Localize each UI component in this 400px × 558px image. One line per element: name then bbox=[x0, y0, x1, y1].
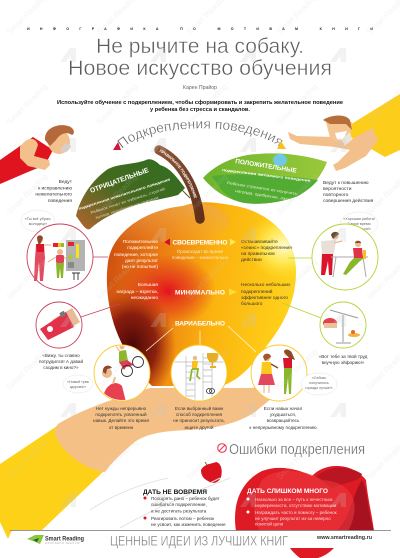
apple text: right column: Несколько небольших bbox=[241, 282, 291, 288]
text: Smart Reading bbox=[95, 172, 139, 216]
panel text: неуверенности, отсутствию мотивации bbox=[255, 503, 337, 508]
text: Smart Reading bbox=[95, 347, 139, 391]
kicker line: ИНФОГРАФИКА ПО МОТИВАМ КНИГИ bbox=[27, 27, 373, 31]
speech bubble: well done bbox=[21, 210, 55, 232]
figure: woman top left bbox=[0, 125, 74, 184]
url: www.smartreading.ru bbox=[316, 535, 372, 541]
text: Smart Reading bbox=[5, 172, 49, 216]
figure: man top right bbox=[288, 94, 400, 171]
speech bubble: good job bbox=[340, 212, 378, 236]
circle: violin lesson bbox=[251, 345, 307, 401]
description bbox=[90, 187, 165, 220]
description bbox=[227, 180, 299, 202]
speech bubble: new trick: «Новый трюк bbox=[67, 380, 89, 384]
panel text: не усвоит, как изменить поведение bbox=[151, 522, 226, 527]
apple text: left column: (но не попытки!) bbox=[122, 264, 158, 270]
author: Карен Прайор bbox=[183, 84, 217, 91]
text: negative effect: поведения bbox=[48, 199, 72, 204]
apple text: left column: поведение, которое bbox=[114, 253, 158, 258]
text: negative effect: к исправлению bbox=[38, 186, 72, 192]
heading: ОТРИЦАТЕЛЬНЫЕ bbox=[89, 167, 150, 195]
caption: ladder: ищите другой bbox=[185, 424, 214, 430]
arm with sleeve bottom left bbox=[0, 385, 285, 539]
circle: bicycle bbox=[94, 344, 150, 402]
caption: scales: внучную эйфорию!» bbox=[322, 359, 365, 365]
title: Новое искусство обучения bbox=[68, 56, 332, 80]
apple text: left column: дает результат bbox=[125, 259, 159, 264]
right leaf: positive bbox=[203, 153, 327, 204]
panel text bbox=[151, 496, 226, 527]
panel text: не улучшит результат из-за неверно bbox=[255, 516, 331, 521]
text: negative effect bbox=[35, 179, 73, 204]
text: Smart Reading bbox=[275, 172, 319, 216]
apple text: left column: подкрепляйте bbox=[127, 244, 158, 251]
apple text: right column: на правильном bbox=[241, 252, 275, 257]
apple heading: timely bbox=[172, 240, 229, 260]
text: Smart Reading bbox=[5, 347, 49, 391]
panel text: Насколько за все – путь к нечестным bbox=[255, 497, 332, 502]
apple text: right column: «сеанс» подкрепления bbox=[241, 246, 292, 251]
caption: cinema: «Вижу, ты славно bbox=[42, 353, 80, 358]
text: Smart Reading bbox=[275, 347, 319, 391]
apple text: left column bbox=[114, 239, 159, 301]
apple text: right column: Останавливайте bbox=[241, 238, 278, 245]
caption: ladder bbox=[173, 405, 225, 430]
heading: reinforcement errors: Ошибки подкрепления bbox=[229, 442, 365, 458]
text: negative effect: нежелательного bbox=[35, 192, 72, 198]
speech bubble: good job: «Хорошая работа! bbox=[343, 217, 375, 221]
speech bubble: new trick: здорово!» bbox=[70, 385, 86, 389]
arrows in apple bbox=[164, 238, 237, 296]
title: Не рычите на собаку. bbox=[96, 34, 304, 58]
table bbox=[331, 257, 368, 277]
caption: scales: «Вот тебе за твой труд bbox=[319, 353, 368, 359]
text: Smart Reading bbox=[5, 437, 49, 481]
red apple remainder bbox=[290, 548, 334, 558]
caption: bicycle: подкреплять усвоенный bbox=[95, 411, 147, 417]
heading: reinforcement of behaviour: Подкрепления поведения bbox=[117, 121, 283, 148]
apple heading: variable: ВАРИАБЕЛЬНО bbox=[175, 320, 225, 328]
text: Smart Reading bbox=[5, 82, 49, 126]
footer: ценные идеи из лучших книг bbox=[45, 542, 80, 544]
speech bubble: good job: прогуляться!» bbox=[347, 227, 371, 231]
apple text: right column: подкреплений bbox=[241, 288, 273, 295]
apple text: left column: Большая bbox=[138, 282, 158, 288]
caption: cinema: потрудился! А давай bbox=[39, 358, 83, 364]
circle: ladder and trophy bbox=[171, 345, 227, 401]
caption: cinema bbox=[39, 353, 83, 370]
sticker chart bbox=[53, 243, 64, 247]
caption: bicycle bbox=[93, 406, 149, 430]
panel: too late bbox=[143, 489, 226, 527]
speech bubble: better now: «Сейчас bbox=[312, 376, 326, 380]
text: Smart Reading bbox=[185, 172, 229, 216]
caption: violin: Если навык начал bbox=[264, 406, 303, 411]
text: Smart Reading bbox=[275, 82, 319, 126]
caption: violin: к непрерывному подкреплению bbox=[249, 425, 317, 430]
text: Smart Reading bbox=[275, 257, 319, 301]
speech bubble: better now bbox=[301, 373, 337, 395]
description: Ребенок стремится их получить: bbox=[227, 180, 299, 196]
subheading: подкрепления нежелательного поведения bbox=[78, 177, 171, 211]
panel text: а не достигать результата bbox=[151, 508, 207, 514]
speech bubble: well done: молодец!» bbox=[29, 222, 47, 226]
panel text bbox=[255, 497, 337, 526]
apple heading: timely: Происходит во время bbox=[177, 249, 224, 254]
caption: violin bbox=[249, 406, 317, 430]
logo bbox=[27, 535, 44, 544]
panel heading: ДАТЬ СЛИШКОМ МНОГО bbox=[247, 488, 328, 495]
caption: ladder: Если выбранный вами bbox=[175, 405, 224, 411]
speech bubble: good job: Самое время bbox=[347, 222, 371, 226]
text: positive effect: вероятности bbox=[323, 187, 352, 192]
left leaf: negative bbox=[76, 159, 185, 229]
cabinet bbox=[66, 240, 85, 280]
caption: bicycle: навык. Делайте это время bbox=[93, 417, 149, 423]
footer bbox=[10, 530, 391, 558]
text: negative effect: Ведут bbox=[59, 179, 73, 185]
panel text: Награждать часто и помногу – ребенок bbox=[255, 510, 337, 515]
text: Smart Reading bbox=[95, 437, 139, 481]
water drop bbox=[273, 154, 287, 166]
caption: bicycle: от времени bbox=[109, 425, 134, 430]
circle: scales bbox=[320, 302, 366, 348]
description: выговор, неодобрительное замечание bbox=[95, 196, 159, 220]
brand: Smart Reading bbox=[45, 536, 84, 542]
subheading: подкрепления желаемого поведения bbox=[222, 168, 311, 183]
caption: scales bbox=[319, 353, 368, 365]
marker: yellow triangle bbox=[277, 141, 286, 149]
text: Smart Reading bbox=[185, 82, 229, 126]
text: positive effect: совершения действия bbox=[323, 197, 374, 204]
text: positive effect bbox=[323, 180, 374, 204]
adult bbox=[321, 232, 342, 275]
woman bbox=[34, 235, 51, 281]
caption: cinema: сходим в кино?» bbox=[43, 365, 79, 370]
apple heading: timely: СВОЕВРЕМЕННО bbox=[172, 240, 228, 246]
text: Smart Reading bbox=[5, 257, 49, 301]
stem label: ПРАВИЛЬНОЕ ПОДКРЕПЛЕНИЕ bbox=[160, 149, 197, 198]
subtitle: у ребенка без стресса и скандалов. bbox=[150, 106, 251, 113]
stem and twigs bbox=[154, 145, 206, 224]
apple text: right column: большого bbox=[241, 301, 263, 307]
text: Smart Reading bbox=[95, 257, 139, 301]
red apple blobs bbox=[235, 466, 374, 531]
speech bubble: well done: «Ты всё убрал, bbox=[25, 217, 51, 221]
panel: too much bbox=[235, 466, 374, 531]
circle: table scene bbox=[312, 224, 378, 290]
title bbox=[68, 34, 332, 80]
apple bbox=[106, 202, 296, 386]
panel text: Поощрять рано – ребенок будет bbox=[151, 496, 221, 501]
apple heading: timely: поведения – моментально bbox=[172, 255, 229, 260]
panel text: Реагировать потом – ребенок bbox=[151, 516, 215, 521]
apple heading: minimal: МИНИМАЛЬНО bbox=[175, 290, 225, 296]
heading: ПОЛОЖИТЕЛЬНЫЕ bbox=[235, 158, 298, 175]
apple text: left column: награда – взрятка, bbox=[116, 290, 158, 295]
connector lines bbox=[81, 257, 321, 352]
apple text: right column bbox=[241, 238, 292, 307]
text: positive effect: Ведут к повышению bbox=[323, 180, 369, 186]
text: Smart Reading bbox=[185, 257, 229, 301]
speech bubble: better now: получилось bbox=[309, 381, 329, 385]
child bbox=[343, 241, 366, 275]
caption: violin: возвращайтесь bbox=[267, 417, 300, 423]
caption: ladder: не приносит результата, bbox=[173, 418, 225, 423]
circle: cinema tickets bbox=[36, 302, 82, 348]
apple text: left column: неожиданно bbox=[131, 296, 158, 301]
panel text: ошибаться подкрепление, bbox=[151, 502, 207, 507]
text: Smart Reading bbox=[185, 347, 229, 391]
description: Ребенок хочет их избежать: строгий bbox=[90, 187, 165, 215]
speech bubble: new trick bbox=[63, 375, 93, 393]
marker: red triangle bbox=[113, 142, 121, 150]
speech bubble: better now: гораздо лучше!» bbox=[305, 386, 333, 390]
subtitle: Используйте обучение с подкреплением, чтобы сформировать и закрепить желательное поведение bbox=[57, 99, 343, 106]
description: награда, одобрение, ласка bbox=[235, 188, 294, 202]
icon: prohibition sign bbox=[218, 444, 226, 452]
apple text: right column: действии bbox=[241, 256, 262, 263]
subtitle bbox=[57, 99, 343, 113]
motion swooshes bbox=[90, 478, 230, 528]
slogan: ЦЕННЫЕ ИДЕИ ИЗ ЛУЧШИХ КНИГ bbox=[110, 534, 289, 548]
text: Smart Reading bbox=[95, 82, 139, 126]
apple text: right column: эффективнее одного bbox=[241, 295, 288, 301]
apple text: left column: Положительное bbox=[123, 239, 158, 245]
text: Smart Reading bbox=[275, 437, 319, 481]
caption: ladder: способ подкрепления bbox=[176, 412, 223, 417]
text: Smart Reading bbox=[185, 437, 229, 481]
panel heading: ДАТЬ НЕ ВОВРЕМЯ bbox=[143, 489, 208, 496]
icon: flying apple bbox=[201, 462, 222, 483]
caption: bicycle: Нет нужды непрерывно bbox=[96, 406, 147, 411]
boy bbox=[48, 249, 69, 278]
panel text: понятой цели bbox=[255, 520, 284, 526]
caption: violin: ухудшаться, bbox=[270, 412, 296, 417]
text: positive effect: повторного bbox=[323, 193, 349, 198]
circle: praise scene bbox=[27, 224, 93, 290]
